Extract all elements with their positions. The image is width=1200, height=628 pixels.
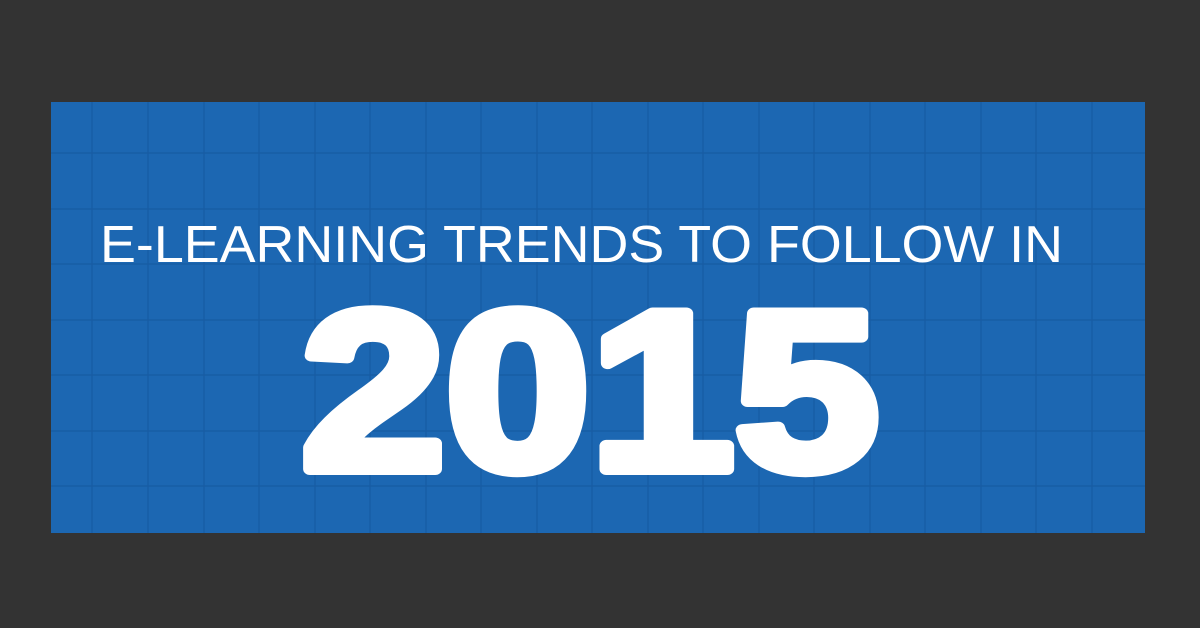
title: E-LEARNING TRENDS TO FOLLOW IN [100, 216, 1063, 274]
year 2015: 2015 [301, 264, 879, 517]
